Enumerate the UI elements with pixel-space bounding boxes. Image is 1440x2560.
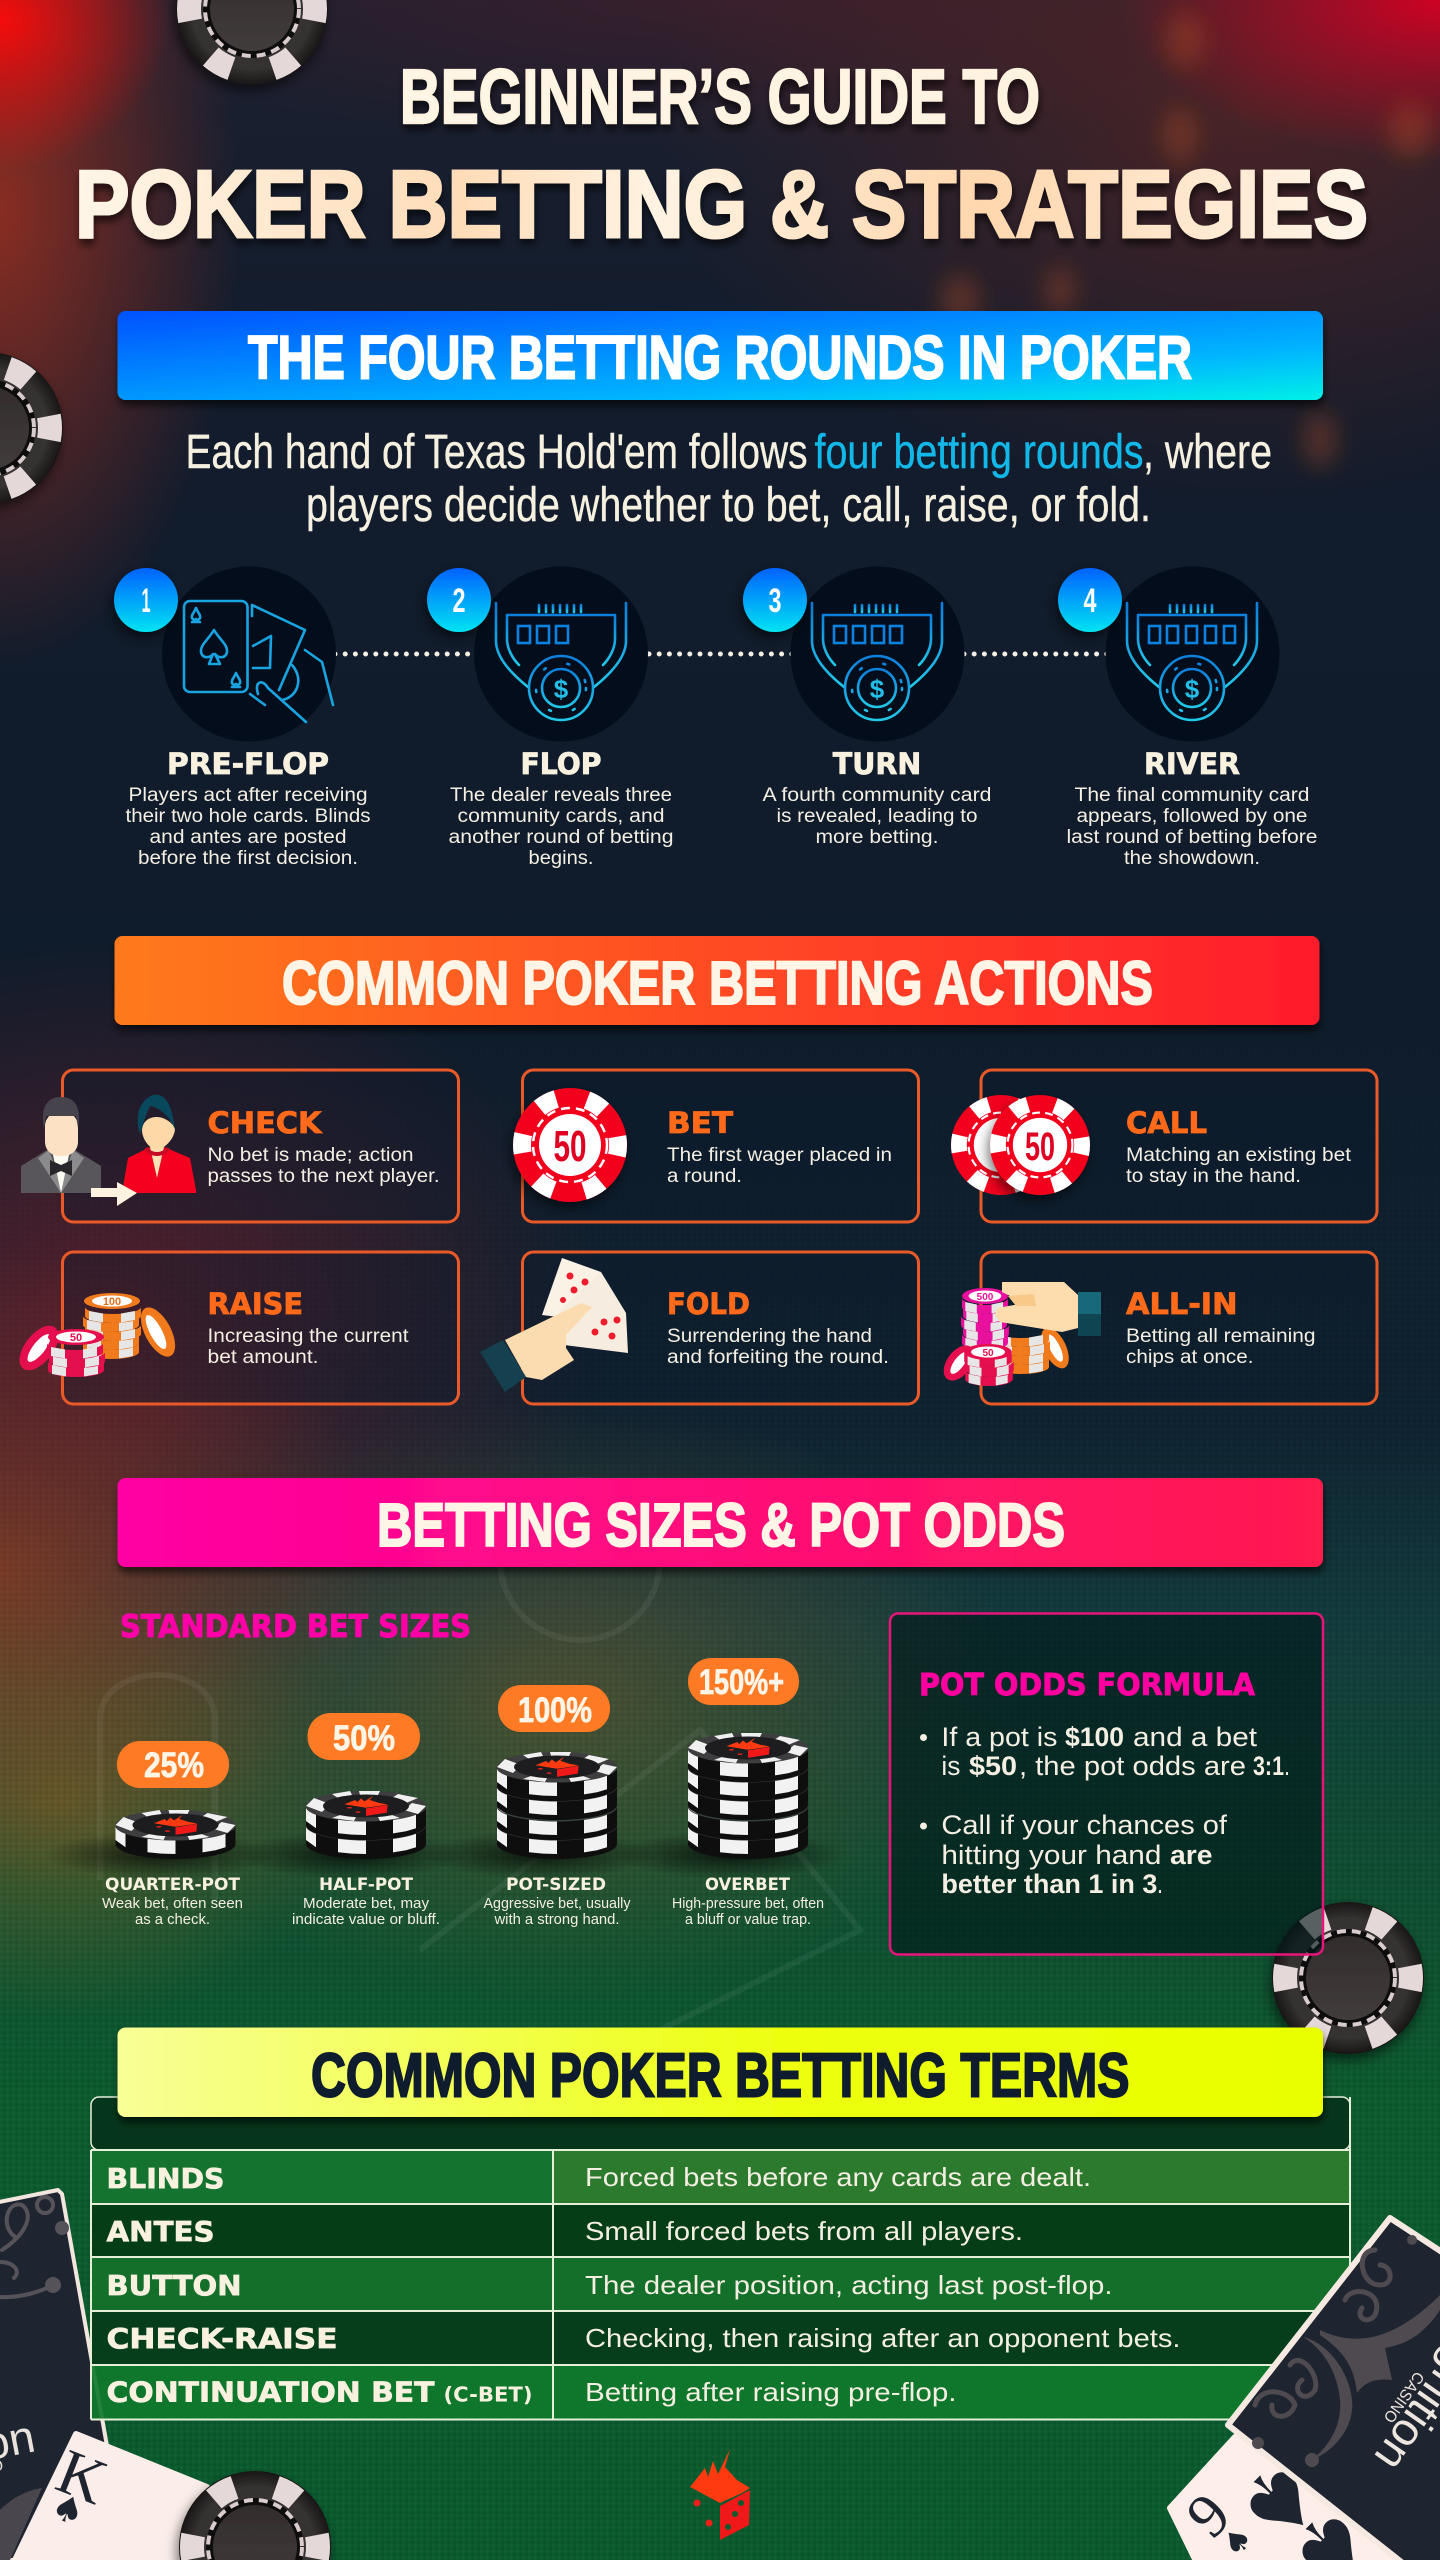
- badge 1: [114, 568, 178, 632]
- description: their two hole cards. Blinds: [126, 806, 370, 827]
- description: [448, 785, 674, 869]
- icon: chip piles: 50: [70, 1332, 82, 1344]
- description: [484, 1895, 631, 1928]
- banner: the four betting rounds: THE FOUR BETTING ROUNDS IN POKER: [248, 324, 1192, 392]
- row: button: [106, 2269, 1112, 2302]
- connector: dotted line 2 to 3: [649, 652, 792, 656]
- row: continuation bet: [106, 2376, 956, 2408]
- connector: dotted line 1 to 2: [335, 652, 478, 656]
- description: Weak bet, often seen: [102, 1895, 243, 1912]
- banner: common poker betting terms: COMMON POKER BETTING TERMS: [311, 2042, 1130, 2110]
- bullet 1: , the pot odds are: [1019, 1751, 1246, 1781]
- description: with a strong hand.: [494, 1911, 620, 1928]
- bet size: half-pot: 50%: [333, 1719, 395, 1758]
- badge 3: 3: [768, 582, 782, 620]
- bullet 1: $50: [969, 1751, 1017, 1781]
- banner: betting sizes and pot odds: [118, 1478, 1323, 1567]
- bullet 1: .: [1284, 1751, 1290, 1781]
- description: Players act after receiving: [128, 785, 368, 806]
- badge 3: [743, 568, 807, 632]
- icon: poker chip top: [176, 0, 328, 85]
- bet size: overbet: OVERBET: [705, 1875, 791, 1894]
- bullet 1: and a bet: [1133, 1722, 1258, 1752]
- chip stack: [497, 1752, 617, 1859]
- banner: betting sizes and pot odds: BETTING SIZES & POT ODDS: [377, 1491, 1065, 1559]
- description: Moderate bet, may: [303, 1895, 430, 1912]
- bullet 2: Call if your chances of: [941, 1810, 1228, 1840]
- description: a bluff or value trap.: [685, 1911, 811, 1928]
- icon: red 50 chip: 50: [554, 1122, 586, 1171]
- row: blinds: BLINDS: [106, 2162, 224, 2195]
- icon: hand folding cards: [480, 1258, 628, 1392]
- description: [667, 1145, 892, 1187]
- icon: two red 50 chips: 50: [1025, 1125, 1055, 1169]
- row: blinds: [106, 2162, 1091, 2195]
- card: fold: FOLD: [667, 1287, 750, 1321]
- description: passes to the next player.: [208, 1166, 440, 1187]
- decorative card: king of spades: K: [48, 2435, 117, 2518]
- description: chips at once.: [1126, 1347, 1254, 1368]
- description: to stay in the hand.: [1126, 1166, 1301, 1187]
- bet size: half-pot: HALF-POT: [319, 1875, 414, 1894]
- icon: chip piles: [12, 1293, 182, 1377]
- bet size: pot-sized: [425, 1685, 655, 1928]
- row: button: BUTTON: [106, 2269, 242, 2302]
- bet size: pot-sized: 100%: [518, 1691, 592, 1730]
- step 2: flop: FLOP: [520, 747, 602, 781]
- decorative card: nine of spades: 9: [1174, 2481, 1244, 2551]
- row: check-raise: CHECK-RAISE: [106, 2322, 338, 2355]
- description: bet amount.: [208, 1347, 318, 1368]
- title: [75, 54, 1368, 258]
- description: Increasing the current: [208, 1326, 409, 1347]
- banner: common poker betting actions: [114, 936, 1320, 1025]
- icon: poker chip left: [0, 352, 63, 504]
- description: indicate value or bluff.: [292, 1911, 440, 1928]
- description: The first wager placed in: [667, 1145, 892, 1166]
- bullet 2: [920, 1810, 1228, 1899]
- description: appears, followed by one: [1076, 806, 1308, 827]
- description: community cards, and: [458, 806, 664, 827]
- card: raise: [12, 1252, 458, 1404]
- decorative card: nine of spades: [1170, 2435, 1440, 2560]
- icon: table with four cards and chip: $: [870, 674, 885, 704]
- description: Surrendering the hand: [667, 1326, 872, 1347]
- description: a round.: [667, 1166, 742, 1187]
- description: the showdown.: [1124, 848, 1260, 869]
- intro text: Each hand of Texas Hold'em follows: [186, 426, 808, 479]
- description: Aggressive bet, usually: [484, 1895, 631, 1912]
- banner: common poker betting terms: [118, 2028, 1323, 2117]
- description: Betting all remaining: [1126, 1326, 1316, 1347]
- bullet 1: 3:1: [1253, 1751, 1284, 1781]
- description: [126, 785, 370, 869]
- row: button: The dealer position, acting last post-flop.: [585, 2270, 1112, 2300]
- bet size: quarter-pot: [45, 1741, 275, 1928]
- description: [1066, 785, 1318, 869]
- intro text: players decide whether to bet, call, raise, or fold.: [306, 479, 1151, 532]
- badge 2: 2: [452, 582, 466, 620]
- title: BEGINNER’S GUIDE TO: [400, 54, 1040, 140]
- logo: flaming die: [690, 2449, 750, 2540]
- description: No bet is made; action: [208, 1145, 414, 1166]
- description: [667, 1326, 889, 1368]
- icon: hand pushing chips: [938, 1282, 1101, 1386]
- table: common poker betting terms: [91, 2097, 1350, 2420]
- badge 4: [1058, 568, 1122, 632]
- row: check-raise: [106, 2322, 1180, 2355]
- step 3: turn: TURN: [833, 747, 921, 781]
- icon: table with four cards and chip: [812, 603, 942, 720]
- description: Matching an existing bet: [1126, 1145, 1352, 1166]
- description: and forfeiting the round.: [667, 1347, 889, 1368]
- card: bet: BET: [667, 1106, 733, 1140]
- icon: table with three cards and chip: [496, 603, 626, 720]
- card: call: [951, 1070, 1377, 1222]
- row: antes: ANTES: [106, 2215, 214, 2248]
- bet size: quarter-pot: QUARTER-POT: [105, 1875, 241, 1894]
- row: antes: [106, 2215, 1023, 2248]
- card: call: CALL: [1126, 1106, 1207, 1140]
- panel: pot odds formula: POT ODDS FORMULA: [919, 1668, 1256, 1703]
- bet size: quarter-pot: 25%: [144, 1746, 204, 1785]
- card: raise: RAISE: [208, 1287, 303, 1321]
- description: [208, 1326, 409, 1368]
- card: check: [21, 1070, 458, 1222]
- decorative faint card and chip outlines: [100, 1480, 860, 2040]
- icon: two red 50 chips: [951, 1095, 1090, 1195]
- chip stack: [116, 1810, 236, 1859]
- card: bet: [513, 1070, 918, 1222]
- chip stack: [306, 1791, 426, 1859]
- row: continuation bet: CONTINUATION BET: [106, 2376, 434, 2408]
- bullet 1: [920, 1722, 1290, 1781]
- bullet 1: If a pot is: [941, 1722, 1057, 1752]
- icon: red 50 chip: [513, 1088, 627, 1202]
- intro text: [186, 426, 1272, 532]
- badge 4: 4: [1084, 582, 1097, 620]
- bullet 2: .: [1157, 1869, 1163, 1899]
- card: all-in: ALL-IN: [1126, 1287, 1238, 1321]
- decorative card: king of spades: ♠: [45, 2485, 90, 2535]
- panel: pot odds formula: [890, 1614, 1323, 1954]
- description: A fourth community card: [762, 785, 992, 806]
- row: continuation bet: (C-BET): [444, 2382, 532, 2406]
- description: [762, 785, 992, 848]
- decorative card: dark card back left: [0, 2190, 107, 2560]
- intro text: four betting rounds: [814, 426, 1144, 479]
- description: another round of betting: [448, 827, 674, 848]
- description: The final community card: [1074, 785, 1310, 806]
- step 2: flop: [427, 566, 674, 869]
- decorative table-felt texture: [0, 1692, 1436, 2558]
- row: check-raise: Checking, then raising after an opponent bets.: [585, 2323, 1180, 2353]
- bet size: pot-sized: POT-SIZED: [506, 1875, 606, 1894]
- bet size: half-pot: [235, 1713, 465, 1928]
- icon: table with five cards and chip: [1127, 603, 1257, 720]
- description: [672, 1895, 824, 1928]
- row: blinds: Forced bets before any cards are dealt.: [585, 2162, 1091, 2192]
- bullet 2: better than 1 in 3: [941, 1869, 1157, 1899]
- bullet 2: are: [1170, 1840, 1212, 1870]
- icon: chip piles: 100: [103, 1296, 121, 1308]
- description: as a check.: [135, 1911, 210, 1928]
- intro text: , where: [1143, 426, 1272, 479]
- card: fold: [480, 1252, 918, 1404]
- card: all-in: [938, 1252, 1377, 1404]
- decorative card: king of spades: [15, 2434, 207, 2560]
- banner: common poker betting actions: COMMON POKER BETTING ACTIONS: [282, 949, 1153, 1017]
- step 4: river: [1058, 566, 1318, 869]
- description: [102, 1895, 243, 1928]
- badge 1: 1: [142, 582, 150, 620]
- description: begins.: [528, 848, 594, 869]
- bet size: overbet: 150%+: [699, 1663, 784, 1702]
- chip stack: [688, 1733, 808, 1859]
- icon: poker chip right: [1272, 1902, 1424, 2054]
- description: High-pressure bet, often: [672, 1895, 824, 1912]
- icon: man and woman with arrow: [21, 1095, 196, 1206]
- banner: the four betting rounds: [118, 311, 1323, 400]
- description: is revealed, leading to: [776, 806, 978, 827]
- heading: standard bet sizes: STANDARD BET SIZES: [120, 1609, 471, 1645]
- step 1: pre-flop: [114, 566, 370, 869]
- badge 2: [427, 568, 491, 632]
- bullet 1: is: [941, 1751, 960, 1781]
- description: [1126, 1326, 1316, 1368]
- row: continuation bet: Betting after raising pre-flop.: [585, 2377, 956, 2407]
- icon: poker chip bottom: [179, 2471, 331, 2560]
- description: and antes are posted: [150, 827, 346, 848]
- description: [1126, 1145, 1352, 1187]
- description: [292, 1895, 440, 1928]
- row: antes: Small forced bets from all players.: [585, 2216, 1023, 2246]
- step 1: pre-flop: PRE-FLOP: [167, 747, 329, 781]
- bullet 2: hitting your hand: [941, 1840, 1161, 1870]
- description: before the first decision.: [138, 848, 358, 869]
- connector: dotted line 3 to 4: [964, 652, 1107, 656]
- step 4: river: RIVER: [1144, 747, 1240, 781]
- bet size: overbet: [615, 1658, 845, 1928]
- icon: hand pushing chips: 500: [977, 1292, 994, 1303]
- icon: hand pushing chips: 50: [982, 1348, 994, 1359]
- bullet 1: $100: [1065, 1722, 1124, 1752]
- decorative card: dark card back right: [1228, 2218, 1440, 2560]
- decorative blurred bokeh lights: [940, 12, 1432, 468]
- description: [208, 1145, 440, 1187]
- card: check: CHECK: [208, 1106, 323, 1140]
- icon: table with five cards and chip: $: [1185, 674, 1200, 704]
- description: more betting.: [816, 827, 938, 848]
- decorative card: dark card back right: CASINO: [1380, 2368, 1427, 2425]
- icon: hole cards and hand: [184, 601, 333, 722]
- description: The dealer reveals three: [450, 785, 672, 806]
- step 3: turn: [743, 566, 992, 848]
- description: last round of betting before: [1066, 827, 1318, 848]
- icon: table with three cards and chip: $: [554, 674, 569, 704]
